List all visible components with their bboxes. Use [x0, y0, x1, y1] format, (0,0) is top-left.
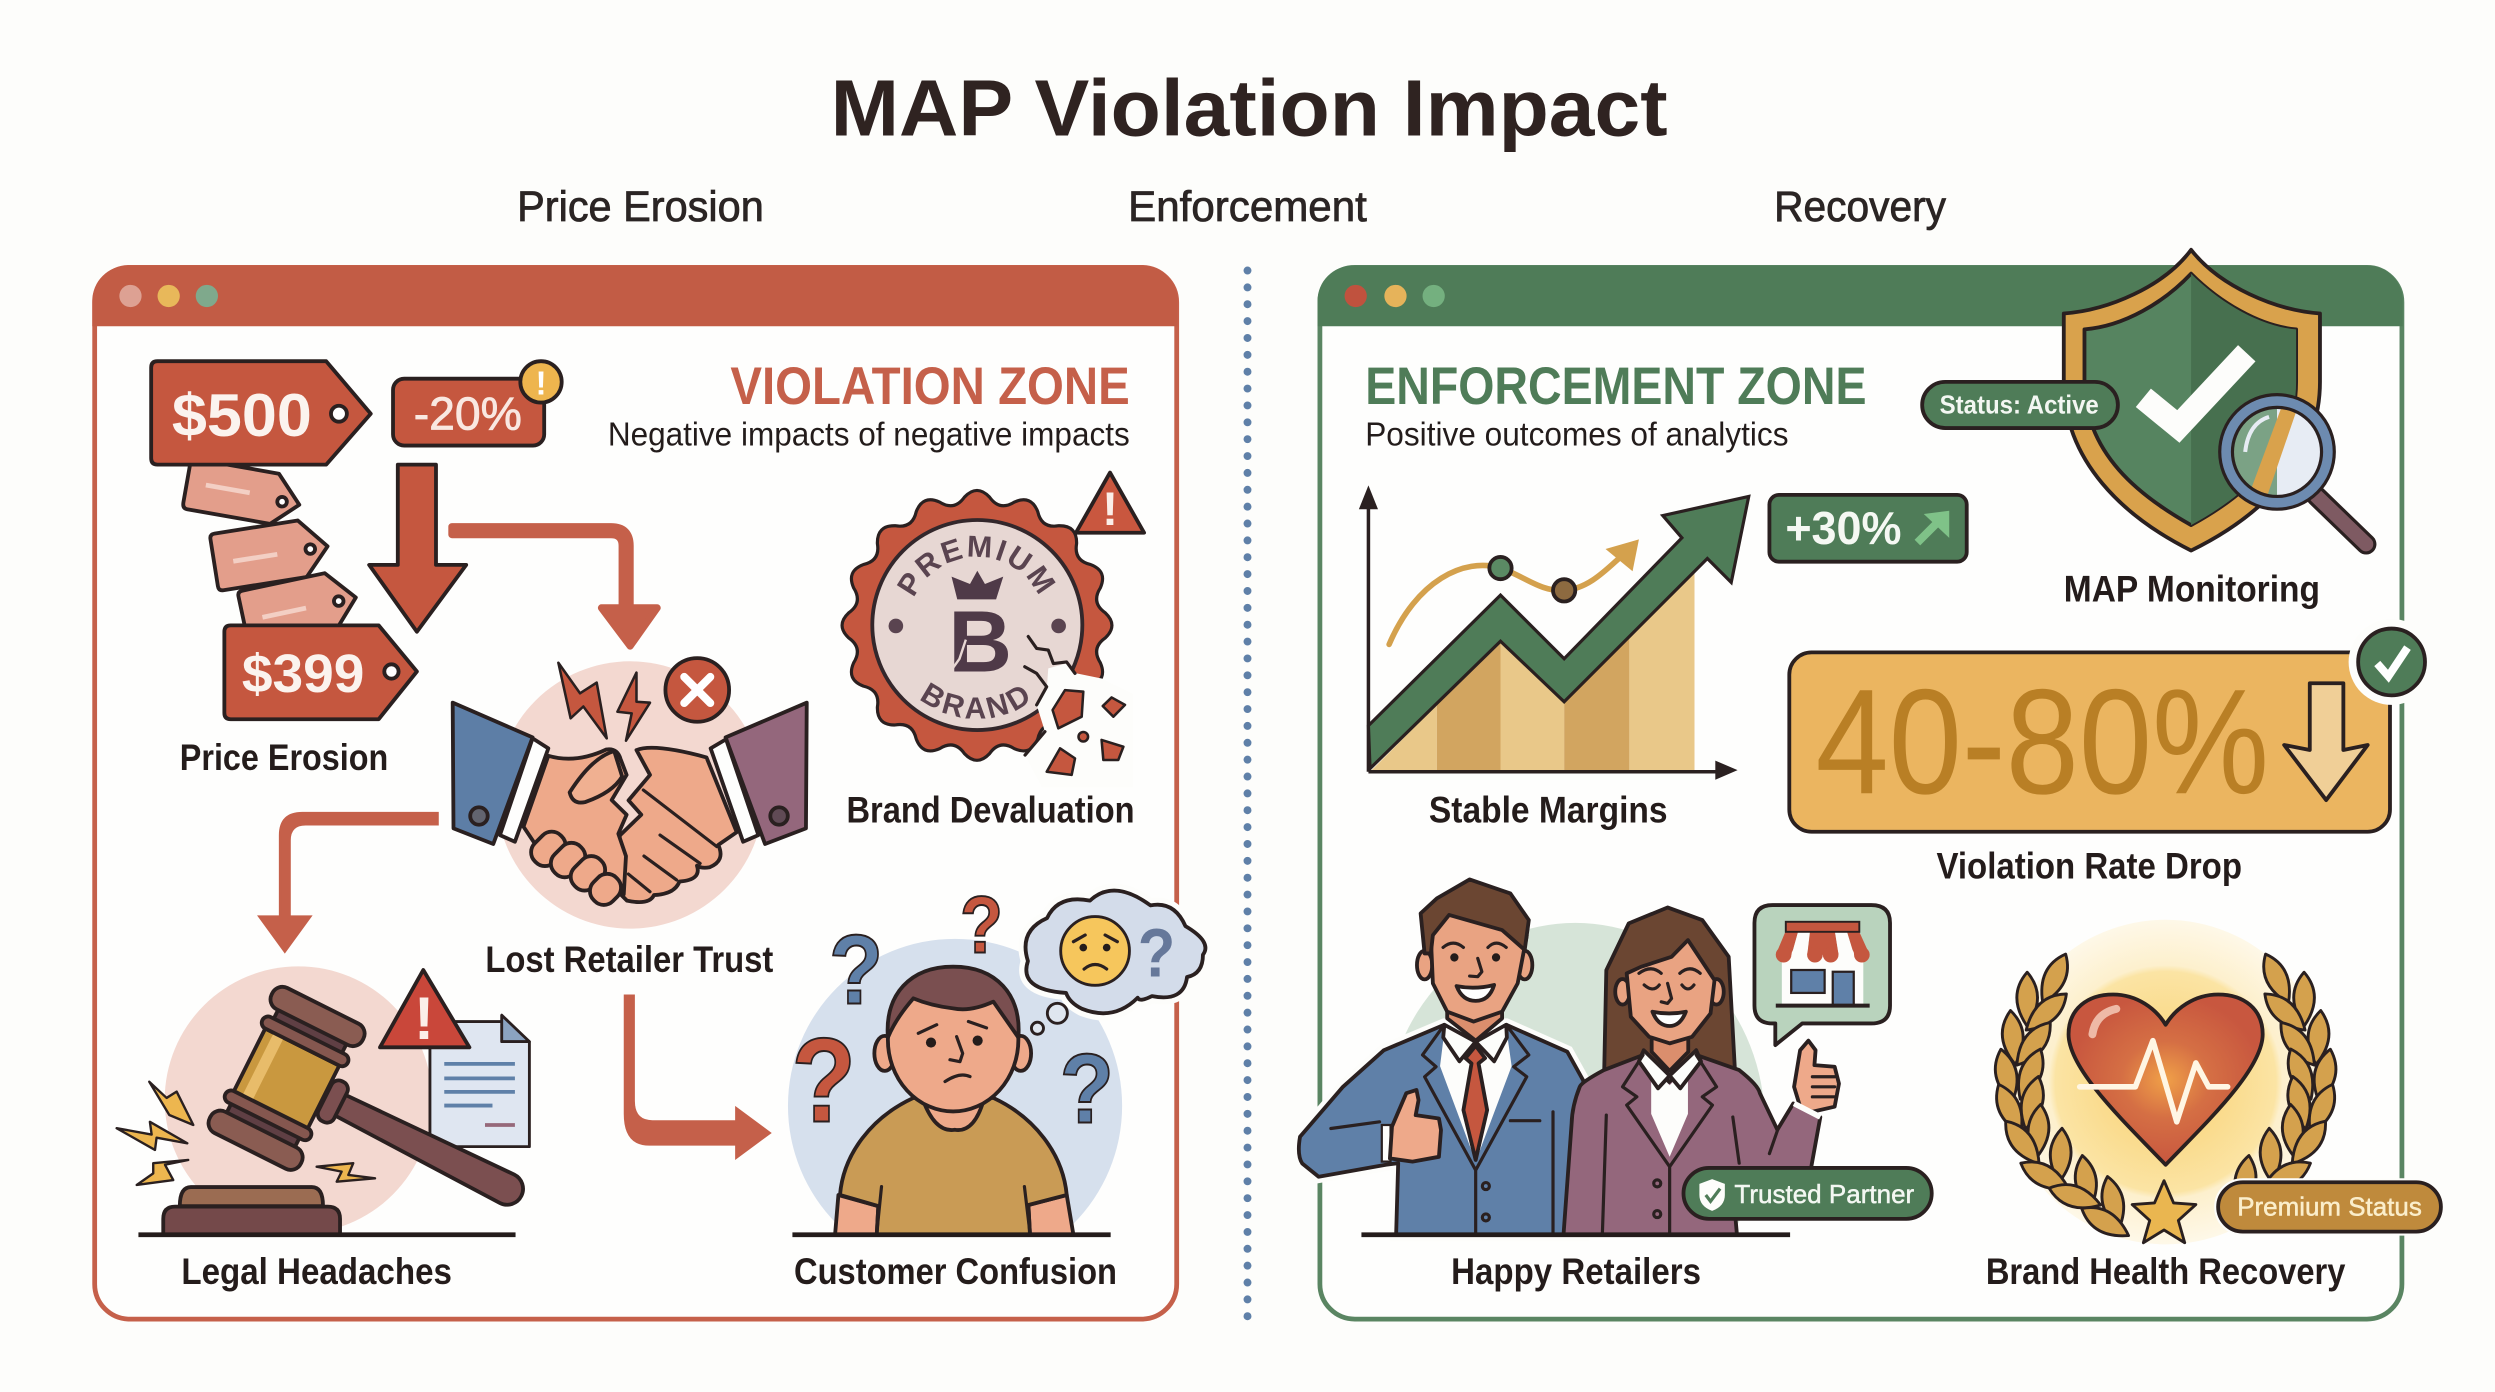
cuff buttons: [470, 807, 788, 825]
zone heading: VIOLATION ZONE: [730, 357, 1130, 416]
$500 tag: [151, 361, 371, 465]
arrow: lost trust to confusion: [624, 995, 772, 1160]
illustration: price erosion tags: [151, 361, 562, 719]
neck: [1447, 1006, 1502, 1041]
head: [888, 968, 1018, 1111]
illustration: brand badge: [840, 470, 1146, 776]
panel: violation zone: [92, 265, 1208, 1322]
ground line: [138, 1233, 516, 1236]
right hand: [614, 748, 737, 902]
pink backdrop: [165, 966, 432, 1234]
star: [2132, 1181, 2196, 1243]
left hand: [524, 749, 627, 894]
letter crack: [952, 640, 966, 670]
label: Brand Health Recovery: Brand Health Recovery: [1986, 1251, 2346, 1292]
blue backdrop: [788, 938, 1122, 1224]
seal centre: [872, 520, 1082, 730]
big metric: 40-80%: [1816, 658, 2269, 825]
illustration: broken handshake: [453, 658, 807, 929]
warning triangle: !: [1102, 483, 1118, 536]
ears: [1615, 979, 1724, 1005]
right sleeve: [726, 703, 807, 844]
panel: enforcement zone: [1299, 250, 2441, 1321]
left sleeve: [453, 703, 533, 844]
panel frame: [95, 267, 1177, 1319]
area stripes: [1372, 574, 1694, 770]
callout: violation rate drop: [1789, 619, 2435, 832]
face: [1639, 969, 1700, 1026]
collar: [1443, 1025, 1507, 1061]
-20% tag: [393, 361, 562, 446]
trusted partner pill: Trusted Partner: [1734, 1179, 1914, 1209]
illustration: happy retailers: [1296, 878, 1934, 1238]
magnifying glass: [2220, 395, 2366, 544]
label: Legal Headaches: Legal Headaches: [181, 1251, 452, 1292]
left thumb: [570, 751, 622, 803]
collar: [1639, 1050, 1701, 1088]
label: Lost Retailer Trust: Lost Retailer Trust: [485, 939, 773, 980]
ground line: [1361, 1233, 1790, 1236]
seal text: BRAND: BRAND: [920, 682, 1028, 718]
suit: [1299, 1025, 1583, 1235]
column heading: Price Erosion: Price Erosion: [517, 183, 764, 231]
gavel: [205, 983, 558, 1268]
down arrow: [369, 465, 466, 632]
title: MAP Violation Impact: [831, 63, 1668, 152]
green backdrop: [1405, 922, 1763, 1224]
tie: [1463, 1046, 1487, 1160]
neck: [1652, 1031, 1688, 1071]
ears: [1417, 951, 1532, 979]
pink backdrop: [496, 661, 764, 929]
window title bar: [1318, 266, 2403, 326]
label: Customer Confusion: Customer Confusion: [794, 1251, 1117, 1292]
shirt cuff: [1382, 1125, 1391, 1162]
+30% badge: +30%: [1785, 502, 1901, 554]
column heading: Enforcement: Enforcement: [1128, 183, 1367, 231]
shirt: [840, 1098, 1067, 1235]
lapels and seams: [1331, 1025, 1553, 1235]
arrow: price erosion to lost trust: [452, 527, 657, 646]
blouse: [1651, 1066, 1688, 1157]
warning triangle: [1076, 473, 1144, 536]
$500 tag: $500: [172, 381, 312, 449]
impact sparks: [117, 1082, 375, 1185]
axes: [1359, 485, 1738, 780]
+30% badge: [1769, 495, 1967, 562]
question marks: ?: [791, 1015, 856, 1148]
label: Price Erosion: Price Erosion: [180, 737, 388, 778]
$399 tag: $399: [242, 644, 364, 704]
premium status pill: [2218, 1182, 2441, 1232]
scalloped seal: [842, 490, 1112, 760]
check badge: [2349, 619, 2435, 705]
face: [918, 1022, 987, 1082]
left cuff: [500, 738, 548, 842]
store icon: [1776, 922, 1870, 1006]
thumb up hand: [1390, 1090, 1441, 1162]
debris: [1047, 690, 1125, 775]
left fingers: [526, 826, 571, 871]
arms: [835, 1195, 1073, 1235]
window dots: [119, 285, 218, 307]
green trend arrow: [1368, 496, 1749, 769]
ground line: [792, 1233, 1111, 1236]
question marks: ?: [1060, 1034, 1114, 1144]
thought cloud: [1026, 891, 1205, 1034]
label: Brand Devaluation: Brand Devaluation: [847, 790, 1135, 831]
man: [1299, 879, 1583, 1235]
building: [1782, 955, 1863, 1005]
premium status pill: Premium Status: [2237, 1194, 2422, 1222]
lapels and seams: [1602, 1055, 1778, 1235]
warning triangle: [380, 970, 469, 1052]
shirt: [1440, 1028, 1512, 1162]
-20% tag: -20%: [414, 388, 522, 440]
zone subtitle: Negative impacts of negative impacts: [608, 417, 1130, 454]
illustration: legal gavel: [115, 966, 531, 1238]
store speech bubble: [1754, 905, 1890, 1045]
heart: [2069, 995, 2263, 1165]
legal document: [430, 1015, 529, 1147]
woman: [1564, 907, 1839, 1235]
falling small tags: [182, 458, 361, 648]
brand letter: B: [948, 592, 1012, 690]
sleeve lines: [877, 1187, 1030, 1233]
face: [1443, 943, 1506, 1001]
question marks: ?: [960, 881, 1003, 971]
heart highlight: [2092, 1009, 2116, 1034]
panel frame: [1320, 267, 2402, 1319]
crown: [952, 571, 1003, 599]
label: Violation Rate Drop: Violation Rate Drop: [1936, 845, 2242, 886]
laurel left: [1989, 950, 2134, 1245]
pulse line: [2080, 1041, 2228, 1122]
-20% tag: !: [535, 366, 547, 403]
ears: [874, 1036, 1031, 1071]
status pill: Status: Active: [1940, 392, 2099, 420]
chipped corner: [1025, 663, 1133, 788]
illustration: MAP monitoring shield: [1922, 250, 2366, 551]
hair: [1421, 879, 1529, 953]
label: Happy Retailers: Happy Retailers: [1451, 1251, 1701, 1292]
laurel right: [2231, 950, 2342, 1210]
illustration: confused customer: [788, 888, 1208, 1238]
trusted partner pill: [1683, 1168, 1932, 1219]
blouse cuff: [1794, 1104, 1820, 1117]
golden glow: [2003, 920, 2328, 1244]
arrow: lost trust to legal: [259, 813, 438, 952]
awning: [1776, 932, 1798, 955]
label: MAP Monitoring: MAP Monitoring: [2064, 568, 2320, 609]
question marks: ?: [829, 914, 883, 1024]
thought cloud: ?: [1138, 916, 1175, 992]
cracks: [1025, 636, 1075, 755]
side dots: [889, 619, 1066, 633]
long hair: [1604, 907, 1735, 1069]
zone heading: ENFORCEMENT ZONE: [1365, 357, 1866, 416]
shield rim: [2064, 250, 2320, 551]
head: [1431, 907, 1527, 1022]
suit halo: [1300, 1025, 1583, 1235]
raised hand: [1794, 1041, 1839, 1112]
window dots: [1345, 285, 1445, 307]
hair: [888, 967, 1019, 1037]
lightning bolts: [558, 663, 650, 741]
gold curve: [1389, 539, 1639, 644]
label: Stable Margins: Stable Margins: [1429, 790, 1668, 831]
column heading: Recovery: Recovery: [1774, 183, 1947, 231]
head: [1627, 940, 1715, 1043]
right finger lines: [628, 790, 717, 892]
check mark: [2143, 353, 2247, 426]
hands: [524, 748, 737, 910]
seal text: PREMIUM: PREMIUM: [896, 536, 1056, 596]
zone subtitle: Positive outcomes of analytics: [1365, 417, 1789, 454]
blazer: [1564, 1055, 1820, 1235]
shield body: [2084, 274, 2296, 525]
window title bar: [92, 266, 1177, 326]
sound block: [163, 1187, 340, 1235]
$399 tag: [224, 625, 417, 719]
right cuff: [711, 739, 758, 842]
amber down arrow: [2284, 683, 2368, 800]
chart: stable margins: [1359, 485, 1967, 780]
question marks: [791, 881, 1114, 1148]
warning triangle: !: [414, 984, 434, 1052]
illustration: brand health heart: [1989, 920, 2441, 1245]
amber panel: [1789, 652, 2390, 832]
status pill: [1922, 382, 2118, 428]
X badge: [665, 658, 729, 722]
center dotted divider: [1245, 271, 1250, 1321]
neck: [923, 1101, 983, 1130]
